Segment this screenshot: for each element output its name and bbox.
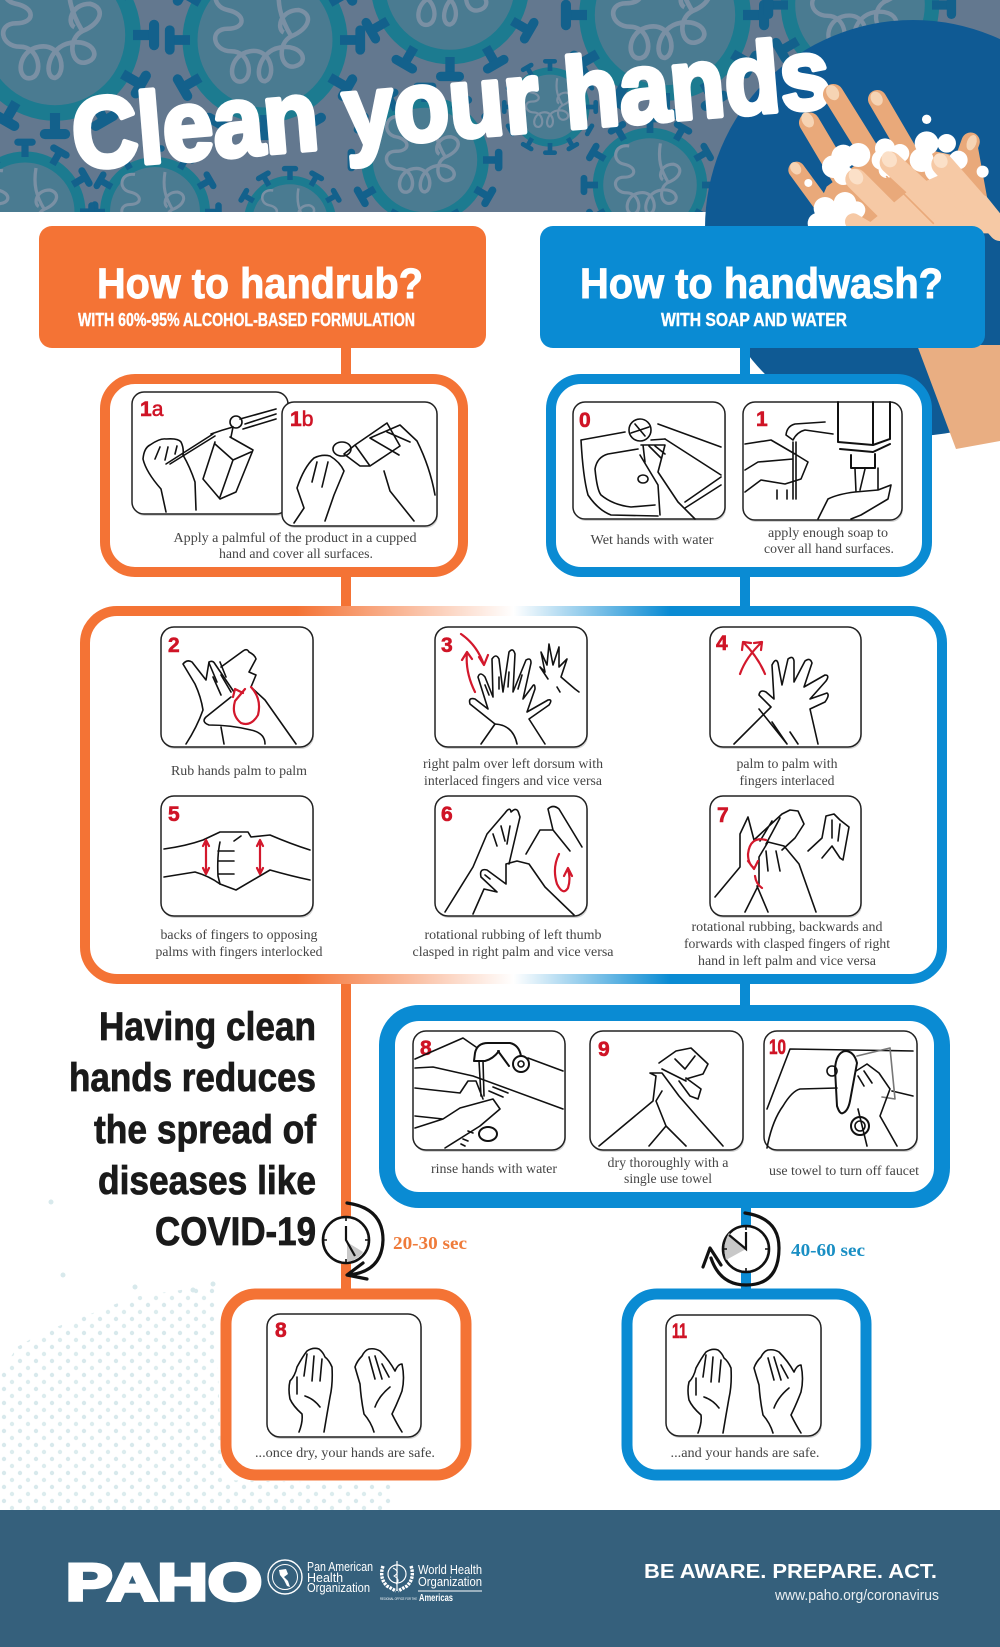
card 9: dry with towel	[590, 1031, 744, 1152]
caption: wet hands: Wet hands with water	[590, 533, 714, 548]
caption: once dry: ...once dry, your hands are safe.	[255, 1446, 435, 1461]
text: Pan American Health Organization: Health	[307, 1571, 343, 1585]
caption: step 5: palms with fingers interlocked	[156, 945, 322, 960]
caption: apply a palmful: Apply a palmful of the product in a cupped	[174, 531, 416, 546]
caption: dry: dry thoroughly with a	[608, 1156, 729, 1171]
header banner with virus pattern	[0, 0, 1000, 212]
card 1b: pouring bottle	[282, 402, 438, 528]
heading panel: how to handrub	[39, 226, 486, 348]
card 4: fingers interlaced	[710, 627, 862, 749]
card 8: safe hands: 8	[275, 1319, 287, 1342]
text: Pan American Health Organization: Organization	[307, 1581, 370, 1595]
text block: clean hands message: diseases like	[98, 1159, 316, 1203]
caption: step 4	[736, 757, 838, 789]
timer: 40-60 seconds	[703, 1213, 779, 1285]
card 3: interlaced fingers: 3	[441, 634, 453, 657]
caption: step 5	[156, 928, 322, 960]
caption: dry	[608, 1156, 729, 1187]
text: World Health Organization	[380, 1562, 482, 1604]
card 6: thumb rotation: 6	[441, 803, 453, 826]
card 0: wet hands	[573, 402, 726, 521]
caption: step 7: hand in left palm and vice versa	[698, 954, 877, 969]
caption: step 7	[684, 920, 890, 969]
panel: handrub final	[226, 1294, 466, 1475]
connector lines	[341, 348, 751, 1293]
card 5: backs of fingers: 5	[168, 803, 180, 826]
card 1a: pump dispenser: 1a	[140, 398, 164, 421]
caption: step 2: Rub hands palm to palm	[171, 764, 307, 779]
footer band	[0, 1510, 1000, 1647]
card 2: palm to palm: 2	[168, 634, 180, 657]
caption: towel faucet: use towel to turn off faucet	[769, 1164, 919, 1179]
illustration: forearm	[917, 345, 1000, 449]
label: 40-60 sec: 40-60 sec	[791, 1240, 865, 1260]
blue circle behind hands	[705, 20, 1000, 436]
timer: 20-30 seconds	[323, 1203, 383, 1279]
card 10: towel off faucet	[764, 1031, 918, 1152]
caption: step 4: palm to palm with	[736, 757, 838, 772]
heading panel: how to handwash	[540, 226, 985, 348]
caption: step 7: rotational rubbing, backwards and	[692, 920, 882, 935]
label: 20-30 sec: 20-30 sec	[393, 1233, 467, 1253]
card 2: palm to palm	[161, 627, 314, 749]
caption: apply enough soap: apply enough soap to	[768, 526, 888, 541]
card 8: safe hands	[267, 1314, 422, 1439]
text block: clean hands message	[69, 1005, 317, 1254]
card 4: fingers interlaced: 4	[716, 632, 728, 655]
heading panel: how to handrub: How to handrub?	[97, 260, 423, 308]
card 1: apply soap	[743, 402, 903, 522]
caption: step 3: interlaced fingers and vice versa	[424, 774, 603, 789]
card 3: interlaced fingers	[435, 627, 588, 749]
caption: step 5: backs of fingers to opposing	[160, 928, 318, 943]
text block: clean hands message: Having clean	[99, 1005, 316, 1049]
panel: handwash final	[627, 1294, 866, 1475]
caption: step 6: rotational rubbing of left thumb	[424, 928, 602, 943]
icon: PAHO emblem	[268, 1560, 302, 1594]
caption: step 6: clasped in right palm and vice versa	[412, 945, 614, 960]
caption: step 6	[412, 928, 614, 960]
text: Pan American Health Organization	[307, 1560, 373, 1595]
slogan: BE AWARE. PREPARE. ACT.	[644, 1561, 937, 1583]
caption: step 3: right palm over left dorsum with	[423, 757, 603, 772]
text: World Health Organization: Americas	[419, 1592, 453, 1604]
text: World Health Organization: REGIONAL OFFICE FOR THE	[380, 1596, 417, 1601]
text: Pan American Health Organization: Pan American	[307, 1560, 373, 1574]
card 9: dry with towel: 9	[598, 1038, 610, 1061]
text: World Health Organization: World Health	[418, 1562, 482, 1577]
text: World Health Organization: Organization	[418, 1574, 482, 1589]
caption: step 4: fingers interlaced	[740, 774, 834, 789]
card 11: safe hands: 11	[672, 1320, 687, 1343]
illustration: soapy hands	[788, 83, 1000, 235]
panel: handrub step 1	[105, 379, 463, 572]
card 11: safe hands	[666, 1315, 822, 1438]
logo: PAHO wordmark: PAHO	[66, 1554, 262, 1612]
heading panel: how to handwash: WITH SOAP AND WATER	[661, 310, 847, 330]
text block: clean hands message: COVID-19	[155, 1210, 316, 1254]
card 5: backs of fingers	[161, 796, 314, 918]
text block: clean hands message: the spread of	[94, 1108, 317, 1152]
panel: handwash steps 8 to 10	[387, 1013, 942, 1200]
caption: dry: single use towel	[624, 1172, 712, 1187]
card 8: rinse: 8	[420, 1037, 432, 1060]
panel: shared steps 2 to 7	[85, 611, 942, 979]
website: www.paho.org/coronavirus	[774, 1587, 939, 1604]
title: Clean your hands	[68, 17, 834, 191]
card 7: clasped fingers: 7	[717, 804, 729, 827]
card 7: clasped fingers	[710, 796, 862, 918]
icon: WHO emblem	[382, 1561, 412, 1591]
card 1a: pump dispenser	[132, 392, 289, 516]
heading panel: how to handwash: How to handwash?	[580, 260, 943, 308]
caption: hand and cover: hand and cover all surfaces.	[219, 547, 373, 562]
card 0: wet hands: 0	[579, 409, 591, 432]
caption: cover all hand surfaces: cover all hand surfaces.	[764, 542, 894, 557]
caption: step 3	[423, 757, 603, 789]
caption: step 7: forwards with clasped fingers of right	[684, 937, 890, 952]
caption: rinse: rinse hands with water	[431, 1162, 557, 1177]
heading panel: how to handrub: WITH 60%-95% ALCOHOL-BASED FORMULATION	[78, 310, 415, 330]
card 8: rinse	[413, 1031, 566, 1152]
text block: clean hands message: hands reduces	[69, 1056, 316, 1100]
panel: handwash steps 0 and 1	[551, 379, 927, 572]
card 6: thumb rotation	[435, 796, 588, 918]
dot texture bottom left	[0, 1200, 392, 1510]
card 1: apply soap: 1	[756, 408, 768, 431]
card 10: towel off faucet: 10	[769, 1036, 786, 1059]
caption: and your hands: ...and your hands are safe.	[670, 1446, 820, 1461]
card 1b: pouring bottle: 1b	[290, 408, 313, 431]
